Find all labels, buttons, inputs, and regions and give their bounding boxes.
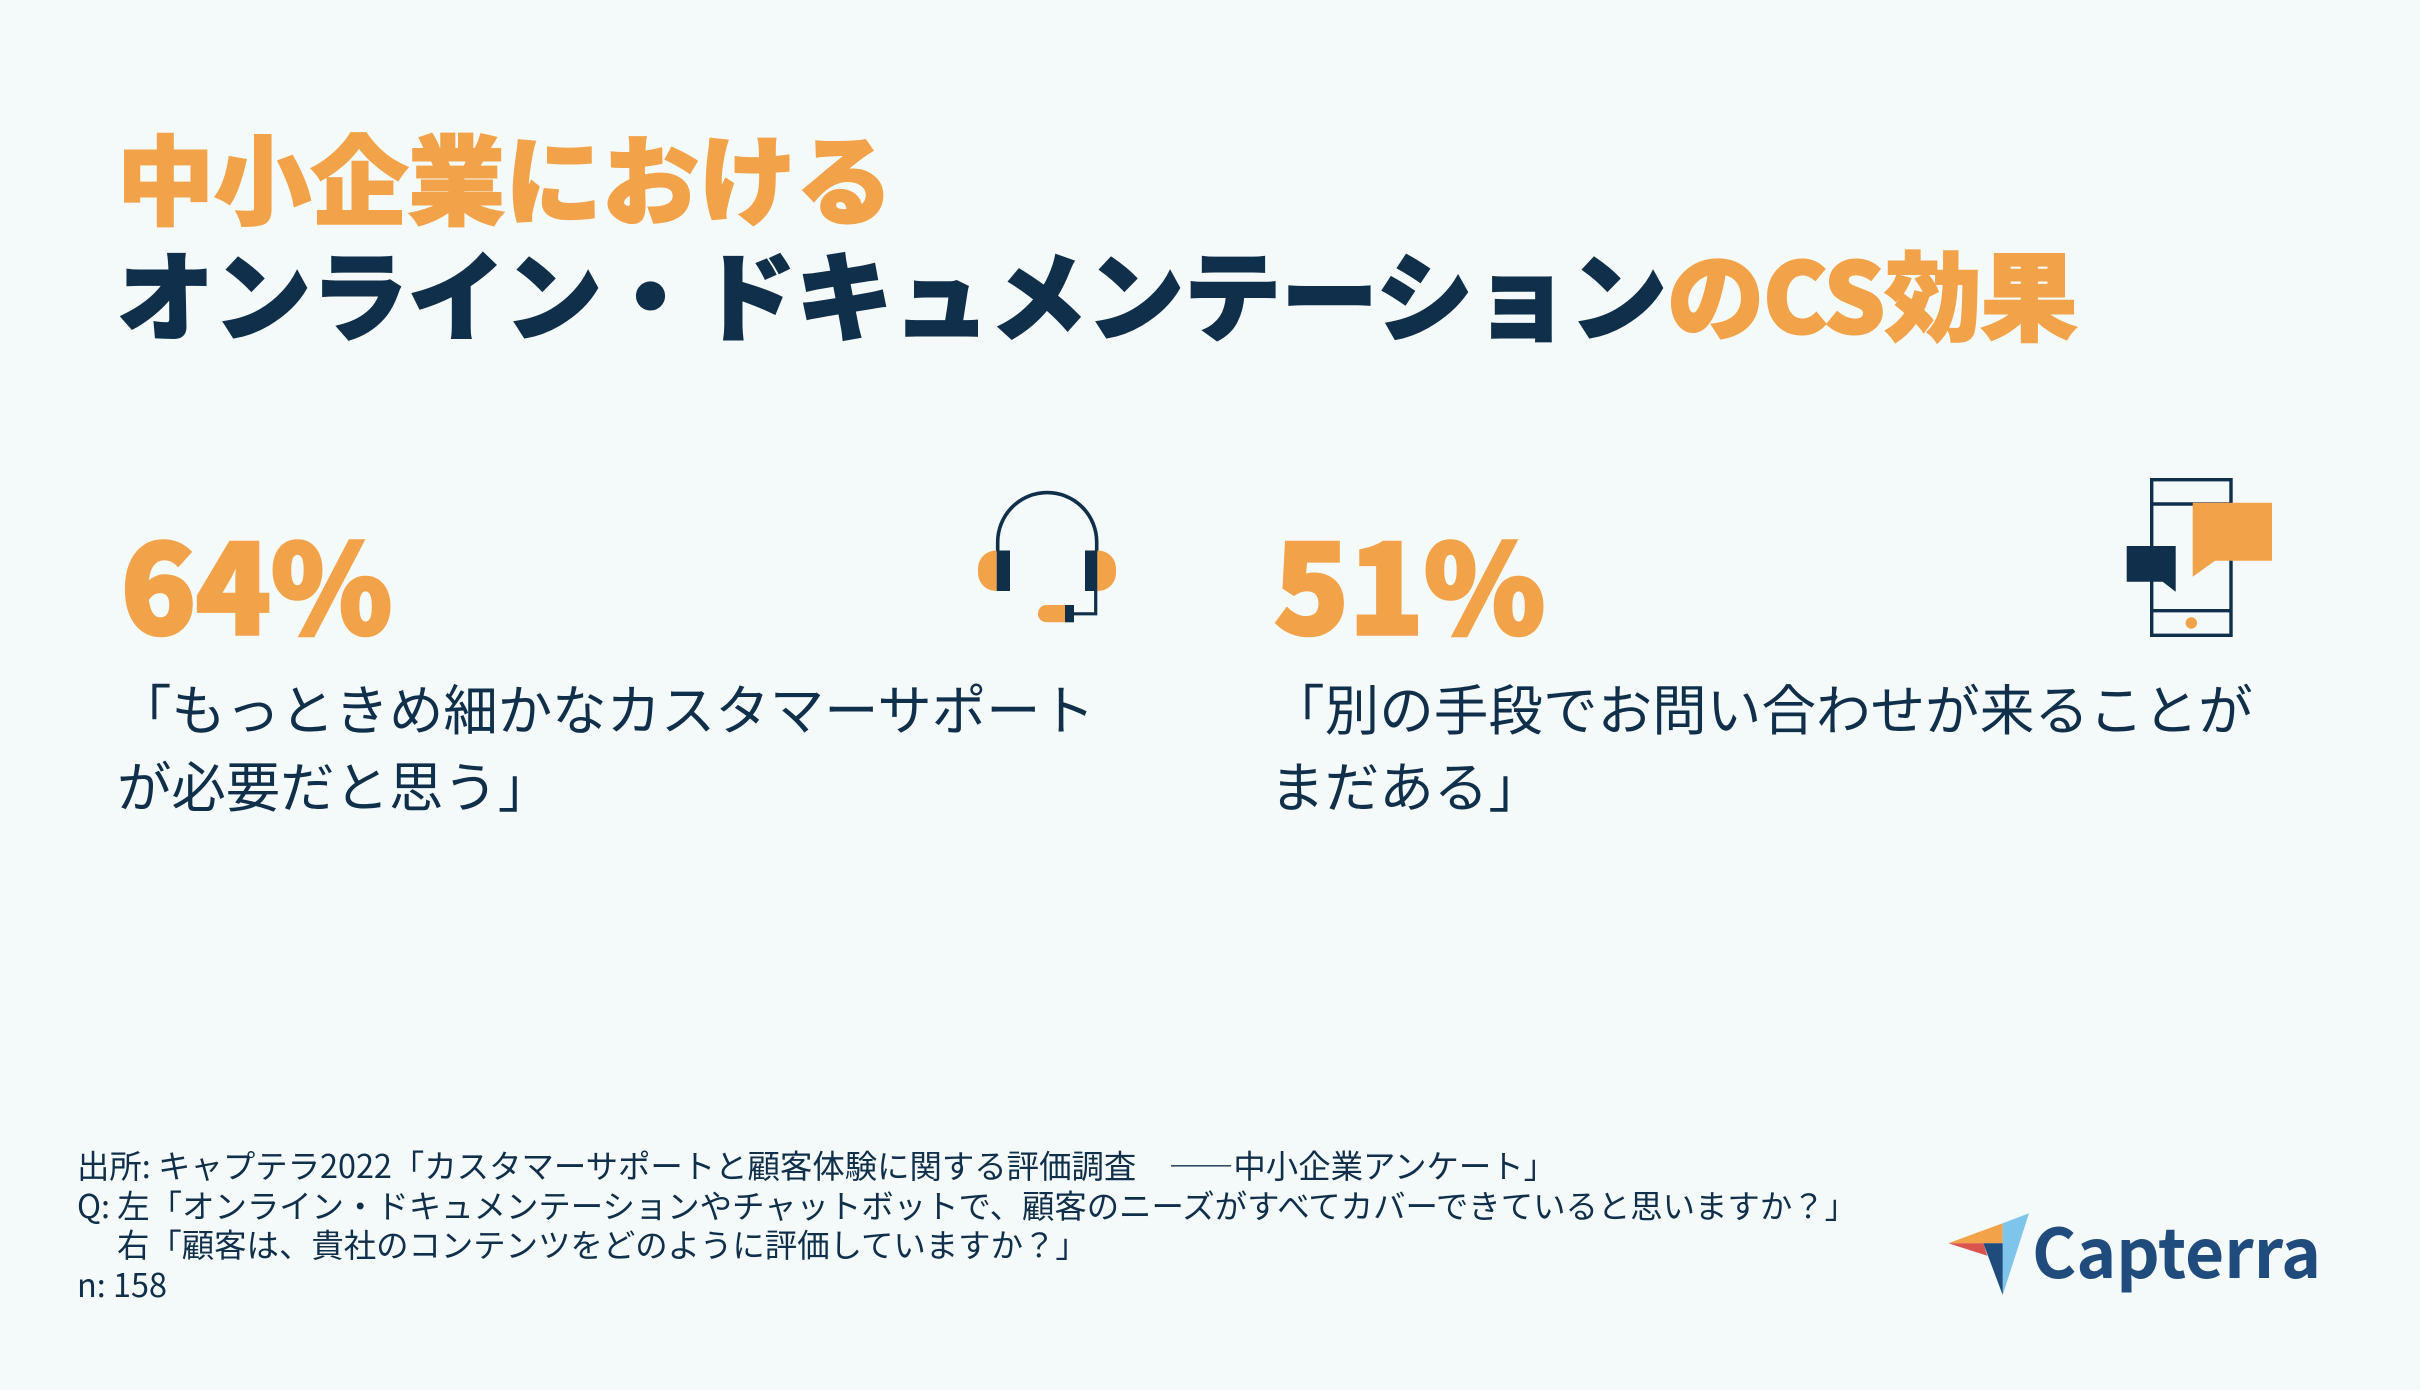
statement: right: 「別の手段でお問い合わせが来ることが [1270,667,2253,746]
statement: left [117,667,1095,822]
source note [77,1141,1857,1307]
title line 1: 中小企業における [117,104,893,245]
logo: Capterra: Capterra [2032,1199,2321,1298]
statement: right [1270,667,2253,822]
title [117,104,2078,361]
statement: left: が必要だと思う」 [117,744,552,822]
title line 2: オンライン・ドキュメンテーションのCS効果 [117,220,2077,361]
source note: Q: 左「オンライン・ドキュメンテーションやチャットボットで、顧客のニーズがすべてカバーできていると思いますか？」 [77,1181,1857,1228]
panel: right statistic [1270,492,2253,822]
statement: right: まだある」 [1270,744,1543,822]
source note: 出所: キャプテラ2022「カスタマーサポートと顧客体験に関する評価調査 ——中小企業アンケート」 [77,1141,1556,1188]
statistic: 64%: 64% [121,492,392,670]
source note: n: 158 [77,1260,167,1307]
statistic: 51%: 51% [1274,492,1545,670]
statement: left: 「もっときめ細かなカスタマーサポート [117,667,1095,746]
panel: left statistic [117,492,1095,822]
source note: 右「顧客は、貴社のコンテンツをどのように評価していますか？」 [117,1220,1088,1267]
